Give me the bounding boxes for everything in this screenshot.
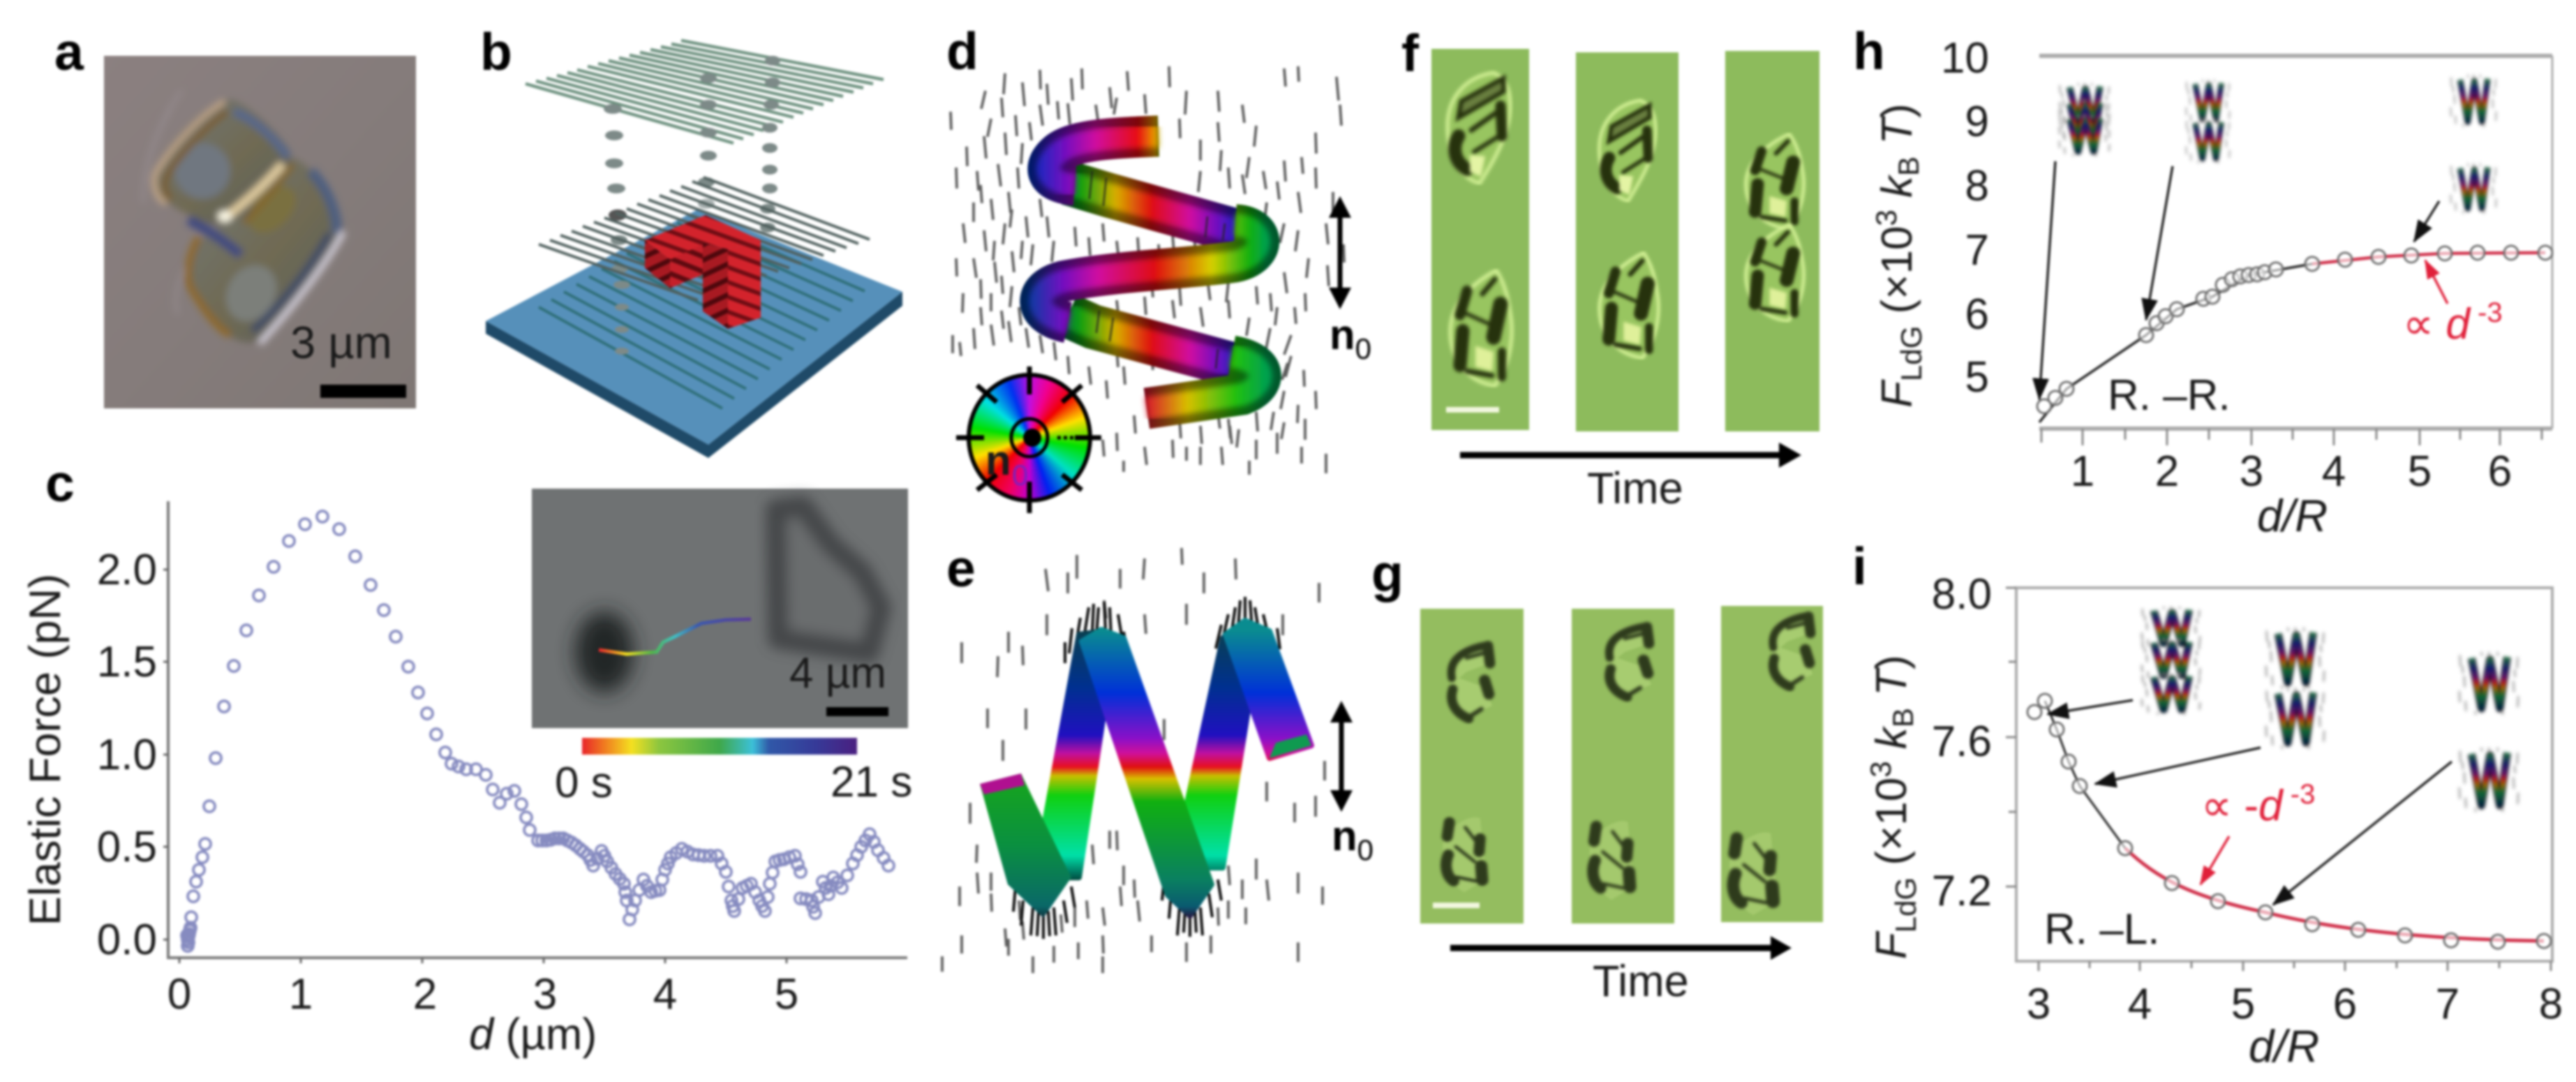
x tick labels: 7 <box>2436 980 2459 1028</box>
x axis title: d/R <box>2249 1021 2319 1072</box>
optical micrograph of helix <box>104 56 416 408</box>
red arrow <box>2425 260 2448 304</box>
helix tube <box>1041 136 1260 408</box>
y tick labels <box>1941 34 1989 401</box>
x tick labels <box>167 970 798 1018</box>
y axis title: LdG <box>1895 326 1928 381</box>
time label: Time <box>1587 464 1683 513</box>
inset scale text: 4 µm <box>789 649 886 697</box>
panel a: micrograph <box>54 22 416 408</box>
label c: c <box>45 454 75 512</box>
y axis title: 3 <box>1870 209 1903 226</box>
red helix block <box>645 215 761 329</box>
helix thumbnail 3 <box>2459 652 2518 715</box>
y tick labels <box>97 546 157 964</box>
y axis title: 3 <box>1864 761 1897 778</box>
panel f: time sequence <box>1401 24 1819 513</box>
frame 2 <box>1576 52 1678 431</box>
plot frame <box>2039 56 2552 429</box>
red fit line <box>2125 848 2544 941</box>
helix thumbnail 4 <box>2450 163 2496 214</box>
n0 label: 0 <box>1355 332 1371 365</box>
y tick labels: 2.0 <box>97 546 157 594</box>
helix thumbnail 3 <box>2450 75 2496 127</box>
colour wheel inset: 0 <box>1012 459 1028 491</box>
y axis title: F <box>1868 931 1916 959</box>
y axis title: k <box>1873 174 1921 209</box>
director arrow <box>1330 701 1353 812</box>
red fit line <box>2312 253 2545 264</box>
x tick labels: 1 <box>2071 447 2094 496</box>
y axis title: B <box>1892 156 1925 176</box>
y axis title: LdG <box>1889 877 1922 933</box>
panel i: energy chart R-L <box>1852 537 2563 1072</box>
scale label: 3 µm <box>290 317 392 368</box>
tuft rods at helix turns <box>1013 597 1280 939</box>
arrows to data <box>2048 700 2452 905</box>
n0 label: 0 <box>1357 833 1373 866</box>
y axis title: F <box>1873 379 1921 408</box>
frame 3 <box>1721 606 1823 922</box>
arrows to data <box>2039 161 2439 399</box>
frame 1 <box>1431 49 1529 430</box>
particle columns <box>604 56 780 355</box>
x tick labels: 1 <box>289 970 313 1018</box>
x tick labels: 8 <box>2539 980 2563 1028</box>
frame 1 <box>1420 609 1524 924</box>
trajectory <box>599 619 751 654</box>
frame 2 <box>1572 609 1674 924</box>
panel b: 3D schematic <box>480 22 902 458</box>
x tick labels: 6 <box>2488 447 2512 496</box>
helix thumbnail 1 <box>2059 83 2109 156</box>
x tick labels: 4 <box>2322 447 2346 496</box>
panel c: elastic force chart <box>21 454 912 1059</box>
y tick labels: 5 <box>1965 353 1989 401</box>
x axis title: d (µm) <box>469 1010 597 1059</box>
helix thumbnail 1 <box>2142 607 2200 715</box>
label h: h <box>1853 22 1885 80</box>
blue plate <box>486 209 902 458</box>
x tick labels <box>2027 980 2563 1028</box>
x tick labels: 0 <box>167 970 191 1018</box>
label a: a <box>54 22 84 81</box>
y tick labels: 6 <box>1965 290 1989 339</box>
panel g: time sequence <box>1371 544 1823 1006</box>
y tick labels: 0.0 <box>97 916 157 964</box>
red arrow <box>2201 836 2229 884</box>
chirality label: R. –R. <box>2108 371 2231 420</box>
time arrow <box>1450 936 1792 960</box>
y axis title: (×10 <box>1868 778 1916 877</box>
x axis title: d/R <box>2257 490 2328 541</box>
x tick labels <box>2071 447 2512 496</box>
helix thumbnail 4 <box>2459 748 2518 812</box>
x tick labels: 4 <box>653 970 677 1018</box>
x tick labels: 4 <box>2128 980 2152 1028</box>
time label: Time <box>1593 957 1689 1006</box>
n0 label: n <box>1332 813 1357 859</box>
y axis title: (×10 <box>1873 226 1921 326</box>
colour bar end label: 21 s <box>831 758 912 806</box>
x tick labels: 5 <box>775 970 798 1018</box>
data points <box>2044 253 2545 406</box>
x tick labels: 2 <box>413 970 437 1018</box>
x tick labels: 3 <box>533 970 557 1018</box>
x tick labels: 2 <box>2155 447 2179 496</box>
scaling annotation: ∝ d <box>2403 300 2470 348</box>
panel d: helix simulation <box>946 22 1371 513</box>
director field rods <box>951 66 1344 475</box>
colour wheel inset <box>956 366 1101 513</box>
colour bar <box>582 738 857 755</box>
x tick labels: 6 <box>2333 980 2357 1028</box>
dotted fit line <box>2039 264 2312 422</box>
y tick labels: 9 <box>1965 98 1989 146</box>
label e: e <box>946 539 976 598</box>
label d: d <box>946 22 978 80</box>
scaling annotation: ∝ -d <box>2201 782 2283 830</box>
top grid <box>526 40 884 143</box>
n0 label: n <box>1330 311 1355 358</box>
label g: g <box>1371 544 1404 602</box>
y axis title: T <box>1868 667 1916 708</box>
helix thumbnail 2 <box>2266 628 2324 749</box>
y tick labels <box>1932 570 1992 915</box>
scale bar <box>1433 903 1480 908</box>
colour wheel inset: n <box>985 437 1011 484</box>
axes <box>168 501 907 958</box>
zig-zag helix tube <box>980 621 1311 918</box>
panel h: energy chart R-R <box>1853 22 2552 541</box>
y tick labels: 8.0 <box>1932 570 1992 618</box>
label i: i <box>1852 537 1867 595</box>
panel e: helix simulation <box>942 539 1373 973</box>
y tick labels: 7.6 <box>1932 718 1992 766</box>
y axis title: Elastic Force (pN) <box>21 574 70 926</box>
scaling annotation: -3 <box>2470 297 2503 328</box>
y axis title: ) <box>1868 655 1916 669</box>
x tick labels: 5 <box>2231 980 2255 1028</box>
y tick labels: 1.5 <box>97 638 157 686</box>
inset image <box>532 489 908 728</box>
data points <box>187 517 888 946</box>
y tick labels: 0.5 <box>97 823 157 871</box>
colour bar start label: 0 s <box>555 759 613 807</box>
scaling annotation: -3 <box>2283 779 2315 810</box>
y axis title: T <box>1873 115 1921 156</box>
label b: b <box>480 22 512 81</box>
y tick labels: 7.2 <box>1932 867 1992 915</box>
scale bar <box>1446 407 1499 413</box>
middle grid <box>539 177 870 300</box>
chirality label: R. –L. <box>2044 905 2159 954</box>
data points <box>2034 701 2544 942</box>
y tick labels: 1.0 <box>97 731 157 779</box>
time arrow <box>1460 443 1801 468</box>
inset scale bar <box>826 707 888 716</box>
frame 3 <box>1725 51 1819 431</box>
plot frame <box>2016 588 2552 961</box>
scale bar <box>320 385 406 398</box>
label f: f <box>1401 24 1420 82</box>
helix thumbnail 2 <box>2186 80 2230 163</box>
y tick labels: 10 <box>1941 34 1989 82</box>
director arrow <box>1329 196 1351 309</box>
black fit line <box>2045 701 2125 848</box>
y axis title: ) <box>1873 103 1921 118</box>
director field rods <box>942 548 1325 973</box>
y tick labels: 7 <box>1965 226 1989 274</box>
x tick labels: 5 <box>2408 447 2432 496</box>
y tick labels: 8 <box>1965 162 1989 210</box>
x tick labels: 3 <box>2240 447 2263 496</box>
y axis title: B <box>1886 708 1919 727</box>
x tick labels: 3 <box>2027 980 2050 1028</box>
y axis title: k <box>1868 725 1916 761</box>
